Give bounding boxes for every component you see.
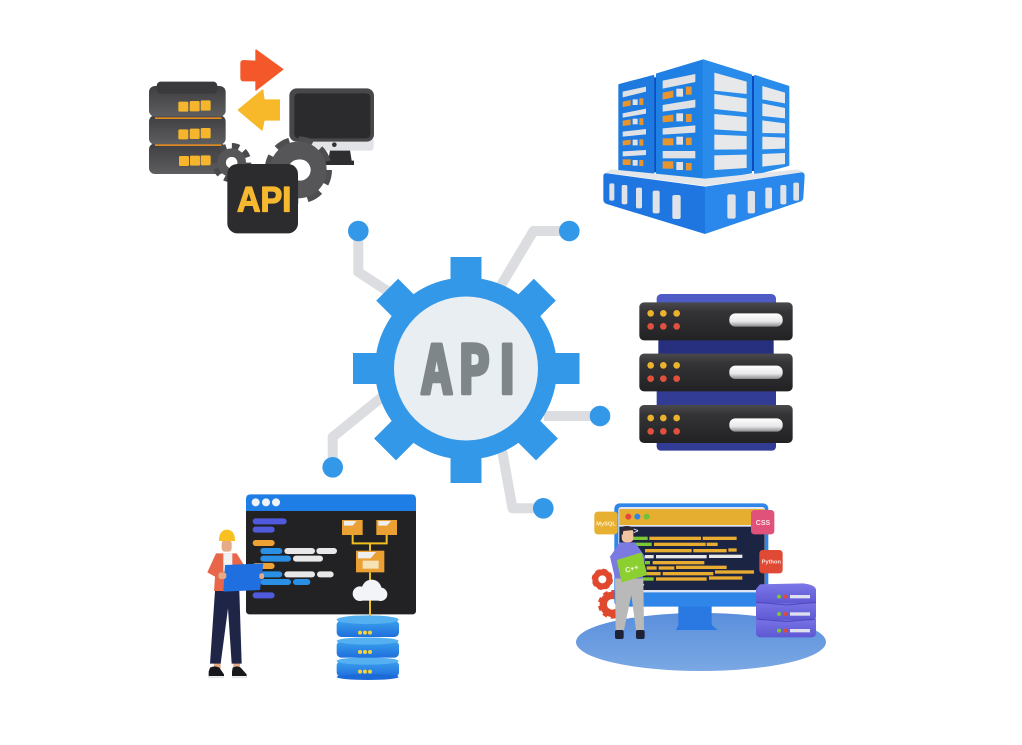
rack back <box>657 294 776 451</box>
left tower windows <box>623 74 695 170</box>
central API gear: AP <box>421 331 490 410</box>
code bars <box>253 518 337 598</box>
developer: C++ <box>624 562 640 575</box>
yellow arrow <box>238 90 279 130</box>
badge: CSS <box>751 510 774 534</box>
database <box>337 615 399 680</box>
orange windows <box>623 87 692 170</box>
icon: API server, monitor and gears <box>149 50 374 233</box>
small gear <box>215 146 248 179</box>
server unit 1 <box>639 302 793 340</box>
icon: blue office towers <box>603 60 805 234</box>
icon: engineer with code window and database <box>207 494 416 680</box>
large gear <box>269 141 328 199</box>
icon: server rack <box>639 294 793 451</box>
connector dot: lower left <box>322 457 343 478</box>
badge: Python: Python <box>762 560 781 566</box>
red arrow <box>241 50 283 90</box>
monitor: > <box>633 526 638 536</box>
API tile: API <box>237 180 291 219</box>
connector dot: lower right <box>533 498 554 519</box>
base <box>603 169 805 234</box>
right side windows <box>714 73 785 170</box>
connector dot: top right <box>559 221 580 241</box>
central API gear: I <box>500 330 515 409</box>
database stack <box>149 82 226 174</box>
badge: MySQL: MySQL <box>596 522 616 528</box>
red gears <box>593 570 625 617</box>
code window <box>246 494 416 614</box>
cloud <box>353 580 387 601</box>
developer <box>610 526 647 639</box>
code lines <box>632 537 754 581</box>
folder tree <box>342 520 397 617</box>
central API gear <box>353 257 580 483</box>
connector dot: right <box>590 406 610 426</box>
monitor: > <box>639 580 644 590</box>
towers <box>619 60 788 181</box>
API tile <box>227 164 298 233</box>
monitor <box>289 88 374 165</box>
monitor <box>614 503 768 607</box>
server unit 2 <box>639 354 793 391</box>
connector dot: top left <box>348 221 369 241</box>
badge: CSS: CSS <box>756 520 771 527</box>
icon: developer at monitor <box>576 503 826 671</box>
server unit 3 <box>639 405 793 443</box>
connector lines <box>333 231 600 508</box>
engineer <box>207 530 264 678</box>
monitor stand <box>676 603 718 630</box>
platform <box>576 613 826 671</box>
badge: MySQL <box>594 512 618 534</box>
badge: Python <box>759 550 783 573</box>
server stack <box>756 583 816 637</box>
